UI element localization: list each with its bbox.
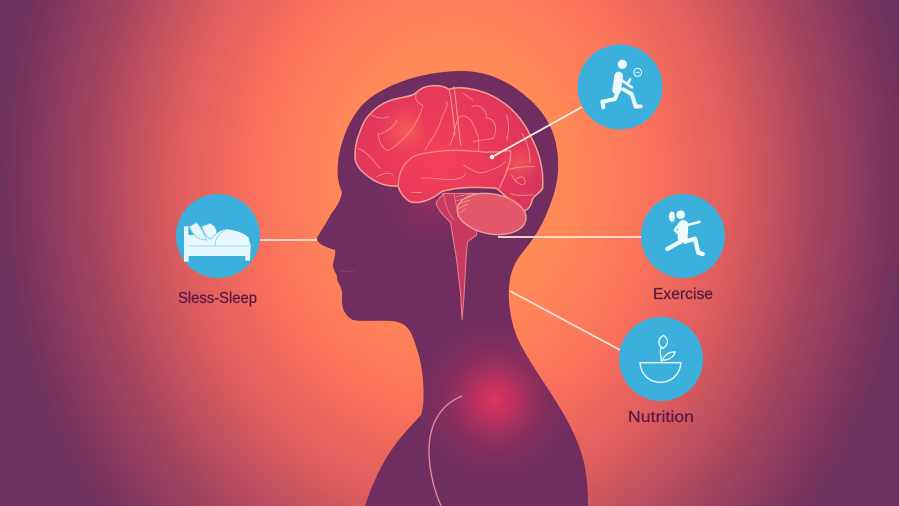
connector: brain to activity icon <box>490 107 582 159</box>
cerebellum <box>454 188 529 240</box>
icon: bed <box>184 223 251 262</box>
cerebrum <box>355 86 543 212</box>
panel: exercise <box>641 194 725 303</box>
brain folds <box>358 87 535 195</box>
icon: person with ball <box>602 60 642 107</box>
shoulder curve <box>429 396 462 506</box>
brain stem <box>436 193 477 320</box>
brain illustration <box>355 86 543 320</box>
nutrition circle <box>619 317 703 401</box>
mouth line <box>339 271 356 272</box>
brain stem detail <box>443 193 458 220</box>
panel: activity <box>578 44 662 130</box>
panel: nutrition <box>619 317 703 426</box>
sleep circle <box>176 194 260 278</box>
icon: bowl with plant <box>640 335 681 382</box>
exercise circle <box>641 194 725 278</box>
label: exercise: Exercise <box>653 286 713 303</box>
human head and torso silhouette <box>317 71 588 506</box>
label: nutrition: Nutrition <box>628 409 694 426</box>
connector: neck to nutrition <box>510 291 620 350</box>
panel: sleep <box>176 194 260 307</box>
connector: cerebellum to exercise <box>498 236 642 238</box>
label: sleep: Sless-Sleep <box>178 290 257 307</box>
activity circle <box>578 44 662 130</box>
connector: nose to sleep <box>260 239 317 241</box>
cerebellum ridges <box>456 193 473 213</box>
icon: runner <box>667 210 703 254</box>
